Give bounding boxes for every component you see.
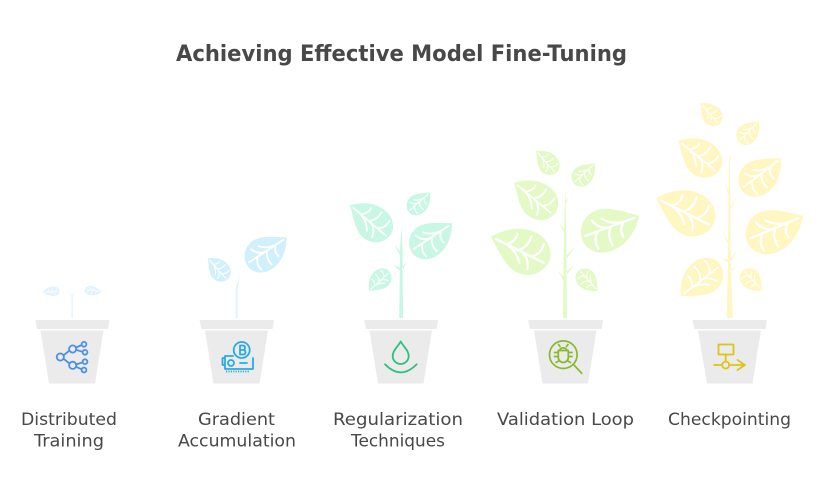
leaf 5 big right bbox=[738, 196, 813, 262]
leaf 4 top left bbox=[529, 144, 564, 180]
label 3: Regularization bbox=[333, 410, 463, 430]
leaf 1 right bbox=[84, 285, 102, 296]
title: Achieving Effective Model Fine-Tuning bbox=[176, 42, 627, 67]
pot body 5 bbox=[698, 330, 761, 384]
pot rim 3 bbox=[364, 320, 438, 329]
leaf 4 lower right bbox=[571, 264, 605, 298]
stem 4 bbox=[557, 190, 575, 318]
leaf 2 large bbox=[237, 224, 297, 280]
plant 1: Distributed Training bbox=[21, 285, 117, 452]
label 4: Validation Loop bbox=[497, 410, 634, 430]
label 2: Accumulation bbox=[178, 432, 296, 452]
pot rim 1 bbox=[36, 320, 110, 329]
leaf 3 upper left bbox=[339, 191, 400, 250]
pot rim 5 bbox=[692, 320, 767, 329]
leaf 3 right bbox=[402, 209, 462, 267]
plant 3: Regularization Techniques bbox=[333, 185, 463, 451]
stem 1 bbox=[68, 291, 76, 318]
icon: checkpoint flow bbox=[714, 344, 745, 370]
leaf 4 big right bbox=[574, 196, 648, 260]
leaf 5 upper right bbox=[731, 145, 792, 204]
icon: bug magnifier bbox=[550, 341, 582, 373]
label 3: Techniques bbox=[350, 432, 445, 452]
leaf 1 left bbox=[42, 286, 60, 297]
label 1: Training bbox=[33, 432, 104, 452]
pot body 3 bbox=[370, 330, 432, 384]
leaf 4 big left bbox=[482, 217, 558, 283]
leaf 5 lower left bbox=[669, 250, 731, 310]
leaf 3 lower left bbox=[362, 264, 396, 298]
leaf 5 upper left bbox=[668, 127, 729, 185]
icon: graphics card with coin bbox=[222, 342, 253, 372]
label 1: Distributed bbox=[21, 410, 117, 430]
leaf 4 upper left bbox=[503, 168, 566, 228]
plant 4: Validation Loop bbox=[482, 144, 648, 430]
label 3 bbox=[333, 410, 463, 452]
leaf 5 big left bbox=[647, 178, 723, 244]
stem 2 bbox=[236, 277, 241, 318]
leaf 5 top left bbox=[694, 97, 727, 130]
pot rim 4 bbox=[528, 320, 603, 329]
leaf 5 lower right bbox=[735, 264, 769, 297]
plant 2: Gradient Accumulation bbox=[178, 224, 297, 452]
pot body 4 bbox=[534, 330, 596, 384]
icon: distributed network bbox=[57, 342, 87, 372]
label 5: Checkpointing bbox=[668, 410, 791, 430]
leaf 3 top right bbox=[402, 185, 437, 220]
label 2 bbox=[178, 410, 296, 452]
label 1 bbox=[21, 410, 117, 452]
leaf 5 top right bbox=[732, 114, 766, 149]
pot rim 2 bbox=[200, 320, 274, 329]
leaf 4 top right bbox=[567, 156, 602, 191]
stem 5 bbox=[721, 145, 738, 318]
pot body 1 bbox=[40, 330, 104, 384]
icon: water drop bbox=[385, 342, 417, 372]
stem 3 bbox=[393, 226, 407, 318]
plant 5: Checkpointing bbox=[647, 97, 813, 430]
pot body 2 bbox=[205, 330, 268, 384]
label 2: Gradient bbox=[198, 410, 275, 430]
leaf 2 small bbox=[200, 251, 235, 286]
